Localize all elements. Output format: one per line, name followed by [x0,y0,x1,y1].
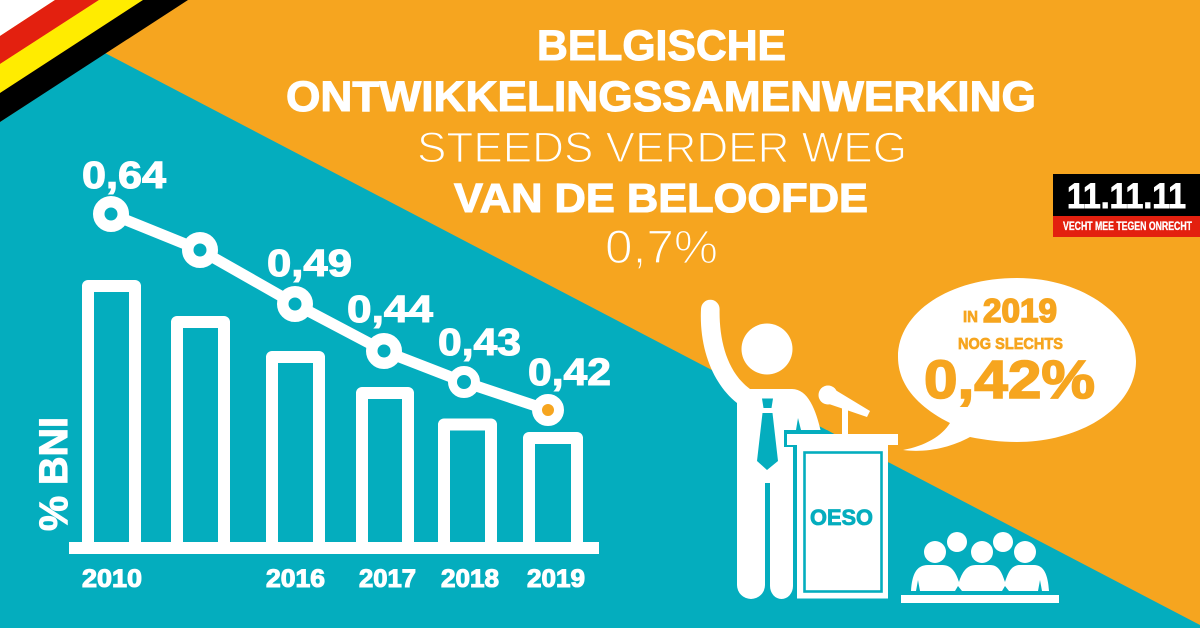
bar 2010 [88,286,135,548]
value labels: 0,64 [82,155,166,197]
value labels: 0,49 [267,243,352,285]
title: 0,7% [605,220,718,273]
lectern label: OESO [810,505,873,530]
year labels: 2017 [359,565,416,593]
year labels: 2010 [82,565,142,593]
icon: OESO lectern [784,430,898,598]
arm notch [796,418,801,430]
value labels: 0,44 [347,289,433,331]
axis label: % BNI: % BNI [32,417,76,531]
bar 2019 [529,438,577,548]
marker 2019 [537,399,559,421]
bar 2017 [362,393,408,548]
year labels: 2019 [527,565,585,593]
marker 2010 [99,202,123,226]
year labels: 2016 [266,565,325,593]
marker 2011 [188,238,212,262]
year labels [82,565,585,593]
value labels [82,155,611,394]
bar 2018 [444,424,491,548]
Belgian flag corner ribbon [0,0,188,122]
bar 2011 [177,322,224,548]
logo: 11.11.11 [1053,174,1200,237]
marker 2016 [283,292,307,316]
year labels: 2018 [441,565,499,593]
title: ONTWIKKELINGSSAMENWERKING [286,73,1036,121]
title: BELGISCHE [537,22,786,70]
marker 2018 [452,370,476,394]
value labels: 0,42 [528,352,611,394]
bubble text: IN [963,309,978,326]
logo: 11.11.11: 11.11.11 [1067,177,1186,216]
bubble text [924,292,1095,410]
marker 2017 [372,339,396,363]
icon: audience [901,532,1059,603]
tie [757,398,778,470]
table [901,595,1059,603]
title: VAN DE BELOOFDE [454,175,868,221]
bubble text: 2019 [983,292,1057,329]
title: STEEDS VERDER WEG [417,124,907,172]
speech bubble [898,278,1136,451]
line chart with markers [82,155,611,421]
bubble text: 0,42% [924,350,1095,410]
bar chart: % BNI [32,286,599,593]
bubble text: NOG SLECHTS [958,336,1063,353]
value labels: 0,43 [438,322,521,364]
icon: microphone [818,386,870,436]
icon: speaker with raised arm [701,300,821,599]
bar 2016 [272,357,319,548]
title [286,22,1036,273]
chart baseline [69,542,599,554]
